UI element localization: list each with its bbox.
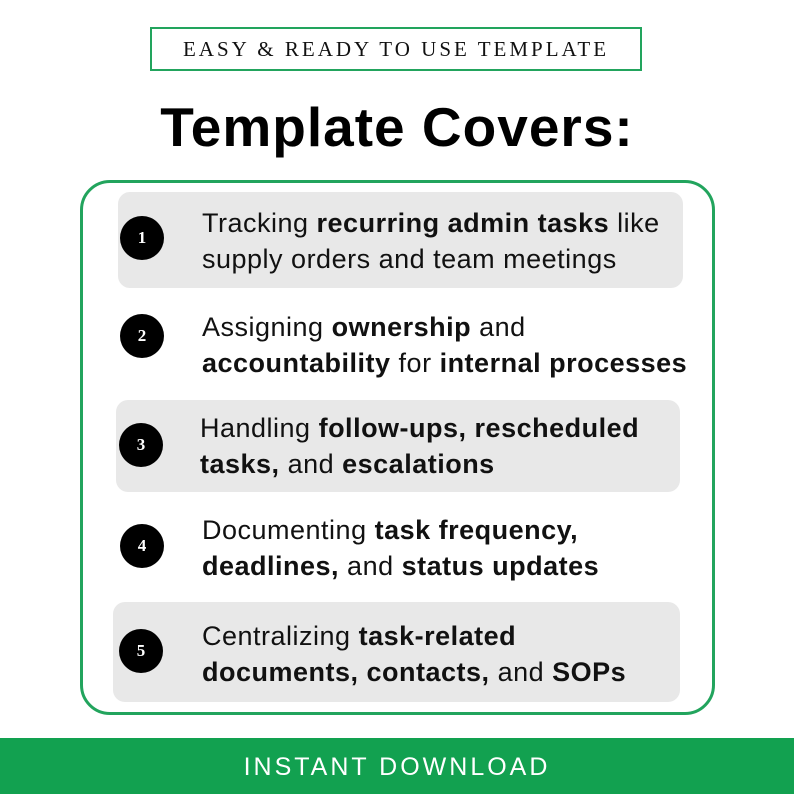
icon: number 5 [119, 629, 163, 673]
icon: number 5: 5 [137, 641, 145, 660]
item 2 text: Assigning ownership and [202, 312, 526, 342]
row 3 background [116, 400, 680, 492]
item 5 text: documents, contacts, and SOPs [202, 657, 626, 687]
icon: number 2: 2 [138, 326, 146, 345]
item 1 text [202, 208, 660, 274]
item 3 text: tasks, and escalations [200, 449, 495, 479]
icon: number 2 [120, 314, 164, 358]
tag: easy & ready [150, 27, 642, 71]
item 3 text: Handling follow-ups, rescheduled [200, 413, 639, 443]
footer bar: INSTANT DOWNLOAD [244, 753, 550, 781]
icon: number 3: 3 [137, 435, 145, 454]
item 5 text [202, 621, 626, 687]
title: Template Covers: [160, 96, 634, 158]
icon: number 4: 4 [138, 536, 146, 555]
item 5 text: Centralizing task-related [202, 621, 516, 651]
icon: number 1: 1 [138, 228, 146, 247]
item 4 text: deadlines, and status updates [202, 551, 599, 581]
row 5 background [113, 602, 680, 702]
footer bar [0, 738, 794, 794]
item 4 text: Documenting task frequency, [202, 515, 578, 545]
panel: list [80, 180, 715, 715]
item 1 text: Tracking recurring admin tasks like [202, 208, 660, 238]
icon: number 4 [120, 524, 164, 568]
item 2 text: accountability for internal processes [202, 348, 687, 378]
icon: number 1 [120, 216, 164, 260]
icon: number 3 [119, 423, 163, 467]
item 4 text [202, 515, 599, 581]
row 1 background [118, 192, 683, 288]
item 3 text [200, 413, 639, 479]
item 1 text: supply orders and team meetings [202, 244, 617, 274]
item 2 text [202, 312, 687, 378]
tag: easy & ready: EASY & READY TO USE TEMPLATE [183, 37, 609, 61]
